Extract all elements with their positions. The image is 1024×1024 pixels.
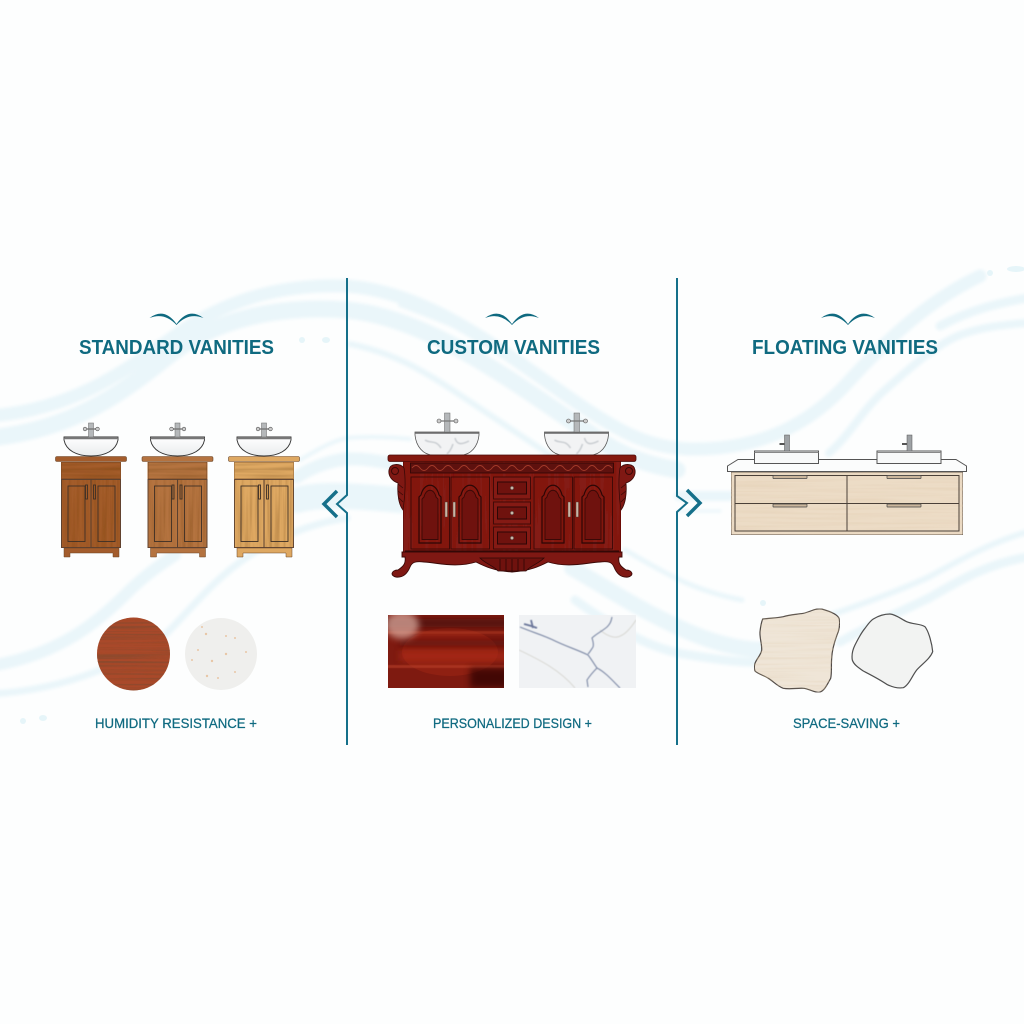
- cabinet: [731, 472, 963, 535]
- swatch: white blob: [852, 614, 933, 688]
- countertop: [388, 455, 636, 462]
- heading: floating vanities: FLOATING VANITIES: [752, 337, 938, 359]
- panel: floating vanities: [728, 314, 966, 731]
- basin right: [544, 413, 608, 455]
- cabinet body: [403, 461, 621, 553]
- icon: bird mark floating: [821, 314, 875, 325]
- carved frieze: [410, 463, 614, 473]
- label: personalized design: PERSONALIZED DESIGN +: [433, 715, 592, 731]
- wave dots: [20, 266, 1024, 724]
- label: space-saving: SPACE-SAVING +: [793, 715, 900, 731]
- drawer fronts: [735, 476, 959, 531]
- label: humidity resistance: HUMIDITY RESISTANCE +: [95, 715, 257, 731]
- arrow: left chevron: [324, 491, 337, 517]
- panel: standard vanities: [56, 314, 300, 731]
- arrow: right chevron: [687, 490, 700, 516]
- lower rail line: [405, 550, 619, 552]
- countertop: [728, 460, 966, 472]
- swatch: mahogany: [388, 615, 504, 688]
- swatch: wood circle: [97, 618, 170, 690]
- doors: [411, 477, 612, 549]
- drawers: [494, 477, 530, 549]
- scroll left: [389, 464, 405, 510]
- base with legs: [392, 552, 632, 577]
- door handles: [445, 502, 578, 517]
- icon: bird mark standard: [150, 314, 204, 325]
- illustration: light wood vanity: [228, 423, 300, 557]
- icon: bird mark custom: [485, 314, 539, 325]
- illustration: medium wood vanity: [142, 423, 213, 557]
- basins: [754, 435, 818, 464]
- illustration: floating double vanity: [728, 435, 966, 535]
- heading: standard vanities: STANDARD VANITIES: [79, 337, 274, 359]
- scroll right: [619, 464, 635, 510]
- divider: left with notch: [337, 278, 347, 745]
- background water waves: [0, 276, 1024, 694]
- handles: [773, 476, 807, 478]
- divider: right with notch: [677, 278, 687, 745]
- basin left: [415, 413, 479, 455]
- swatch: marble: [519, 615, 636, 688]
- panel: custom vanities: [380, 314, 636, 731]
- swatch: pale wood blob: [754, 609, 840, 692]
- apron carving: [480, 558, 544, 572]
- swatch: quartz circle: [185, 618, 257, 690]
- illustration: carved red double vanity: [388, 413, 636, 577]
- illustration: dark wood vanity: [56, 423, 126, 557]
- heading: custom vanities: CUSTOM VANITIES: [427, 337, 600, 359]
